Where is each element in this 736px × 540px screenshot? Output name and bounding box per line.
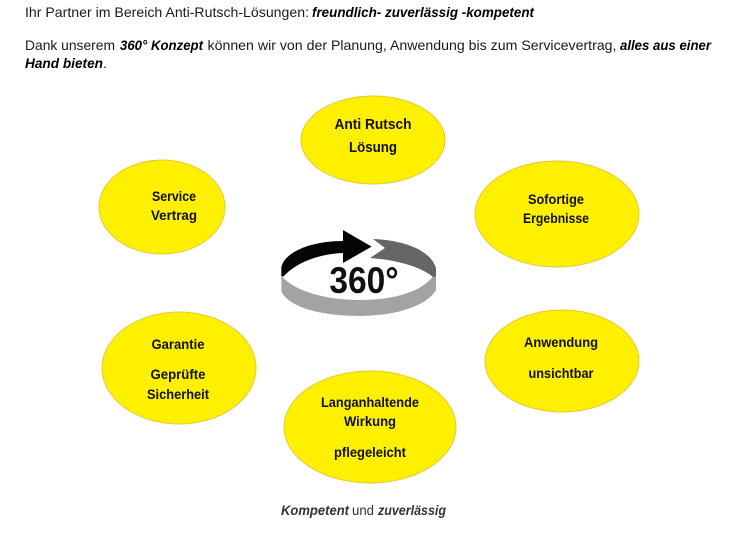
- bubble: Garantie Geprüfte Sicherheit: Geprüfte: [150, 366, 206, 382]
- bubble: Service Vertrag: Vertrag: [151, 207, 197, 223]
- bubble: Anwendung unsichtbar: [485, 310, 639, 412]
- intro line: Ihr Partner im Bereich Anti-Rutsch-Lösungen:: [25, 4, 309, 20]
- caption: [281, 502, 446, 518]
- bubble: Sofortige Ergebnisse: Sofortige: [528, 191, 584, 207]
- bubble: Langanhaltende Wirkung pflegeleicht: pflegeleicht: [334, 444, 406, 460]
- bubble: Service Vertrag: Service: [152, 188, 196, 204]
- intro line: freundlich- zuverlässig -kompetent: [312, 4, 535, 20]
- caption: und: [352, 502, 374, 518]
- bubble: Sofortige Ergebnisse: [475, 161, 639, 267]
- intro line: [25, 4, 535, 20]
- bubble: Anti Rutsch Lösung: Anti Rutsch: [334, 116, 412, 133]
- intro paragraph: alles aus einer: [620, 37, 712, 53]
- icon: 360 degree arrow: [281, 230, 436, 316]
- caption: zuverlässig: [377, 502, 446, 518]
- bubble: Anti Rutsch Lösung: [301, 96, 445, 184]
- intro paragraph: .: [103, 55, 107, 71]
- bubble: Langanhaltende Wirkung pflegeleicht: Wirkung: [344, 413, 396, 429]
- bubble: Garantie Geprüfte Sicherheit: Sicherheit: [147, 386, 209, 402]
- bubble: Anti Rutsch Lösung: Lösung: [349, 139, 397, 156]
- intro paragraph: Dank unserem: [25, 37, 115, 53]
- bubble: Garantie Geprüfte Sicherheit: Garantie: [152, 336, 205, 352]
- intro paragraph: [25, 37, 712, 71]
- intro paragraph: Hand bieten: [25, 55, 103, 71]
- intro paragraph: 360° Konzept: [120, 37, 204, 53]
- bubble: Garantie Geprüfte Sicherheit: [102, 312, 256, 424]
- bubble: Sofortige Ergebnisse: Ergebnisse: [523, 210, 589, 226]
- caption: Kompetent: [281, 502, 350, 518]
- bubble: Anwendung unsichtbar: Anwendung: [524, 334, 598, 350]
- bubble: Service Vertrag: [99, 160, 225, 254]
- icon: 360 degree arrow: 360°: [329, 259, 399, 301]
- intro paragraph: können wir von der Planung, Anwendung bis zum Servicevertrag,: [208, 37, 616, 53]
- bubble: Anwendung unsichtbar: unsichtbar: [528, 365, 594, 381]
- bubble: Langanhaltende Wirkung pflegeleicht: Langanhaltende: [321, 394, 419, 410]
- bubble: Langanhaltende Wirkung pflegeleicht: [284, 371, 456, 483]
